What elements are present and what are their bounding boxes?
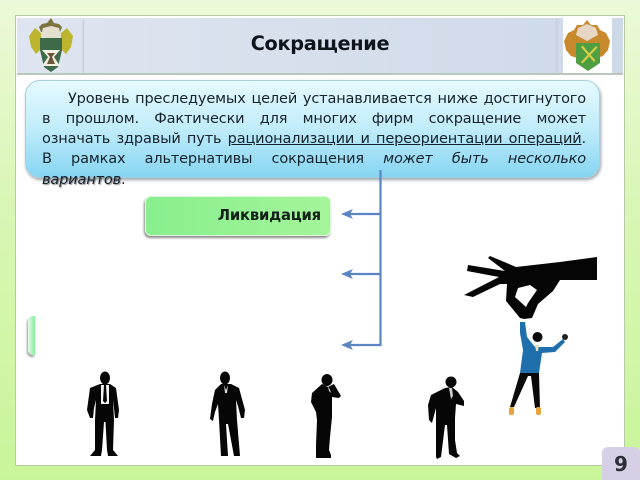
green box: Ликвидация [145, 196, 331, 236]
text block: description [42, 91, 586, 188]
page number badge [602, 447, 640, 480]
icon: hand [464, 256, 597, 319]
text block: description: Уровень преследуемых целей устанавливается ниже достигнутого [68, 91, 586, 107]
panel: blue text box [25, 80, 600, 178]
green box: Ликвидация: Ликвидация [218, 207, 321, 224]
arrows: branching connector [341, 170, 382, 350]
title: Сокращение [251, 32, 389, 55]
icon: right emblem [556, 18, 612, 74]
text block: description: в прошлом. Фактически для многих фирм сокращение может [42, 111, 586, 127]
text block: description: В рамках альтернативы сокращения может быть несколько [42, 151, 586, 167]
figure: businessman 1 [87, 372, 119, 456]
icon: left emblem [29, 18, 84, 74]
figure: businessman 3 [311, 374, 341, 458]
figure: businessman 4 [428, 376, 464, 459]
figure: businessman 2 [210, 372, 245, 456]
illustration: hand holding employee [464, 256, 597, 415]
header band [17, 18, 623, 75]
page number badge: 9 [614, 452, 628, 476]
text block: description: вариантов. [42, 172, 125, 188]
icon: dangling man [509, 322, 568, 415]
text block: description: означать здравый путь рационализации и переориентации операций. [42, 131, 586, 147]
green box: clipped sliver [28, 316, 35, 355]
